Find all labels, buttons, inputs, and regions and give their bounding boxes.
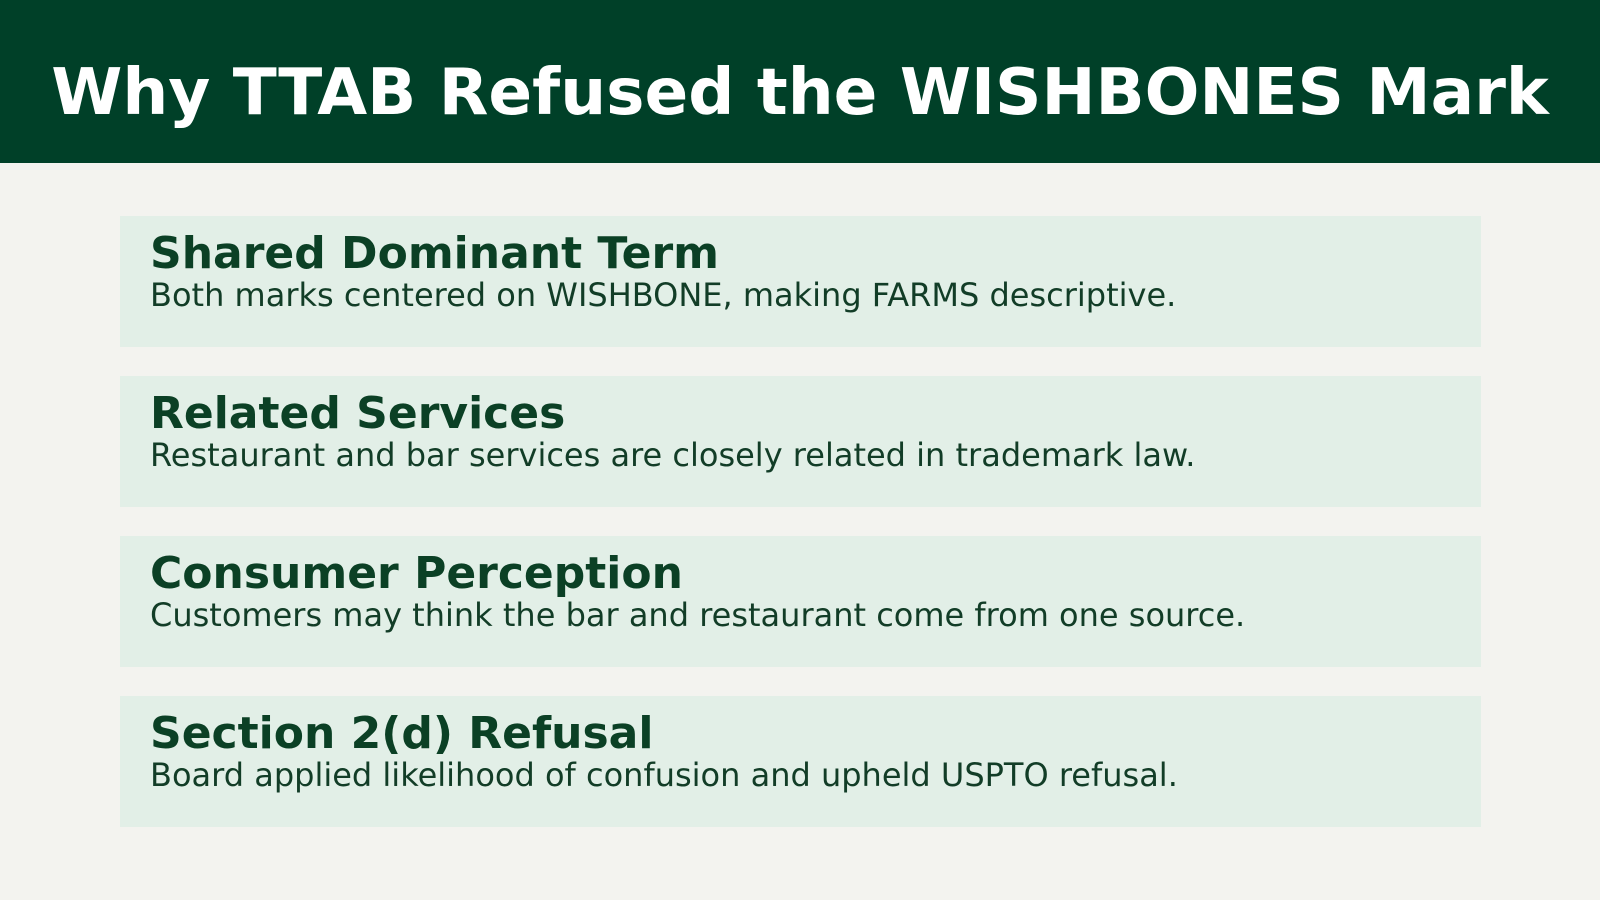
- header banner: [0, 0, 1600, 163]
- heading: Consumer Perception: [150, 548, 683, 599]
- text block: Restaurant and bar services are closely related in trademark law.: [150, 436, 1195, 474]
- panel: related services: [120, 376, 1481, 507]
- heading: Section 2(d) Refusal: [150, 708, 653, 759]
- text block: Both marks centered on WISHBONE, making FARMS descriptive.: [150, 276, 1176, 314]
- panel: section 2(d) refusal: [120, 696, 1481, 827]
- heading: Related Services: [150, 388, 565, 439]
- text block: Board applied likelihood of confusion and upheld USPTO refusal.: [150, 756, 1178, 794]
- panel: shared dominant term: [120, 216, 1481, 347]
- title: Why TTAB Refused the WISHBONES Mark: [51, 55, 1549, 130]
- text block: Customers may think the bar and restaurant come from one source.: [150, 596, 1245, 634]
- heading: Shared Dominant Term: [150, 228, 719, 279]
- panel: consumer perception: [120, 536, 1481, 667]
